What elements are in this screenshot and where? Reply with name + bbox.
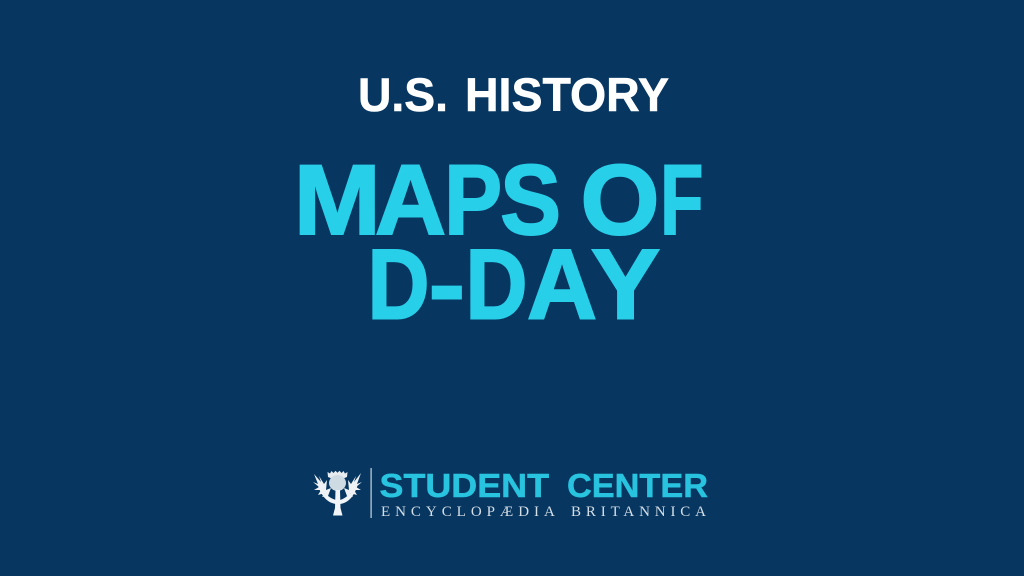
left leaf spikes xyxy=(313,474,331,497)
right leaf spikes xyxy=(344,473,362,497)
title: Maps of D-Day: D xyxy=(466,228,528,340)
thistle head xyxy=(329,475,346,491)
title: Maps of D-Day: S xyxy=(500,144,561,255)
icon: thistle xyxy=(313,471,362,516)
subject heading: U.S. History: U.S. xyxy=(358,68,448,121)
title: Maps of D-Day xyxy=(294,144,703,340)
title: Maps of D-Day: M xyxy=(294,144,381,255)
logo subtitle: BRITANNICA xyxy=(571,504,706,520)
thistle crown xyxy=(328,471,348,479)
title: Maps of D-Day: O xyxy=(580,144,660,255)
title: Maps of D-Day: - xyxy=(429,228,465,340)
logo: Student Center Encyclopaedia Britannica xyxy=(313,467,708,520)
title: Maps of D-Day: D xyxy=(368,228,430,340)
divider xyxy=(370,468,372,518)
title: Maps of D-Day: P xyxy=(444,144,502,255)
title: Maps of D-Day: Y xyxy=(591,228,660,340)
logo wordmark: STUDENT xyxy=(380,467,549,504)
logo wordmark: CENTER xyxy=(567,467,708,504)
subject heading: U.S. History: HISTORY xyxy=(465,68,669,121)
trunk and branches xyxy=(333,490,342,516)
title: Maps of D-Day: A xyxy=(375,144,446,255)
title: Maps of D-Day: A xyxy=(527,228,597,340)
title: Maps of D-Day: F xyxy=(660,144,703,255)
logo subtitle: ENCYCLOPÆDIA xyxy=(381,504,555,520)
